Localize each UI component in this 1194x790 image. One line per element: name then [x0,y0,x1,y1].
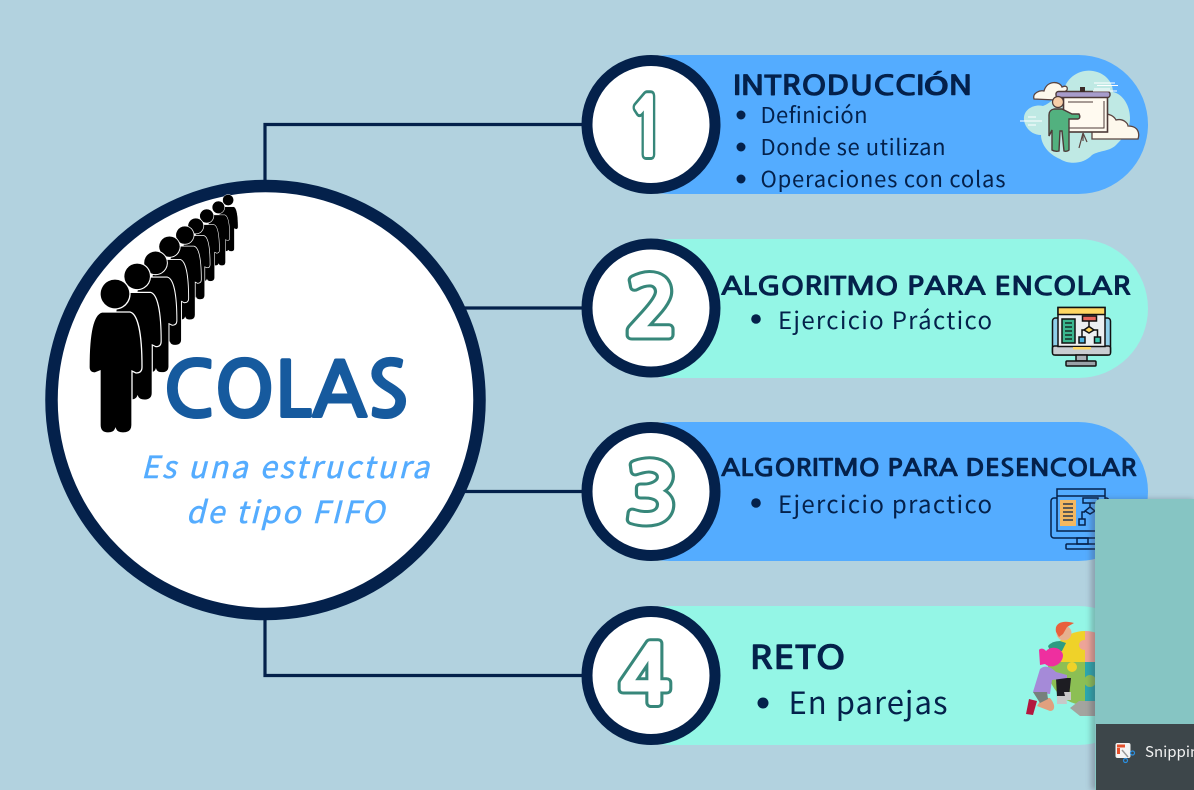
icon: queue of people [89,194,238,433]
panel: central circle [52,186,480,614]
icon: snipping tool [1116,743,1134,762]
title: COLAS [163,354,409,429]
bullet list [736,98,1006,194]
connector lines [265,124,590,676]
icon: presenter with board [1020,71,1139,163]
heading: ALGORITMO PARA ENCOLAR [721,274,1132,299]
heading: RETO [750,642,846,674]
bullet: Ejercicio Práctico [778,301,992,336]
number 2: 2 [626,268,678,348]
number 4: 4 [620,636,670,716]
bullet list: Donde se utilizan [760,130,946,162]
number 1: 1 [628,88,666,168]
subtitle: de tipo FIFO [186,488,387,532]
number 3: 3 [626,455,678,534]
number 4: 4 [620,636,670,716]
icon: children with puzzle [1026,622,1097,716]
number 2: 2 [626,268,678,348]
number 3: 3 [626,455,678,534]
heading: ALGORITMO PARA DESENCOLAR [721,456,1137,480]
bullet list: Operaciones con colas [760,162,1006,194]
panel: step 3 algoritmo para desencolar [587,422,1148,561]
subtitle: Es una estructura [141,443,431,487]
subtitle [141,443,431,532]
heading: INTRODUCCIÓN [733,70,972,100]
bullet list: Definición [760,98,868,130]
panel: step 2 algoritmo para encolar [587,239,1148,378]
icon: monitor flowchart dark [1051,489,1109,549]
bullet: En parejas [788,678,948,723]
icon: monitor flowchart [1052,308,1110,366]
panel: step 1 introduccion [587,55,1148,194]
panel: step 4 reto [587,606,1148,745]
number 1: 1 [628,88,666,168]
overlay: snipping tool notification [1091,499,1194,790]
bullet: Ejercicio practico [778,485,992,520]
